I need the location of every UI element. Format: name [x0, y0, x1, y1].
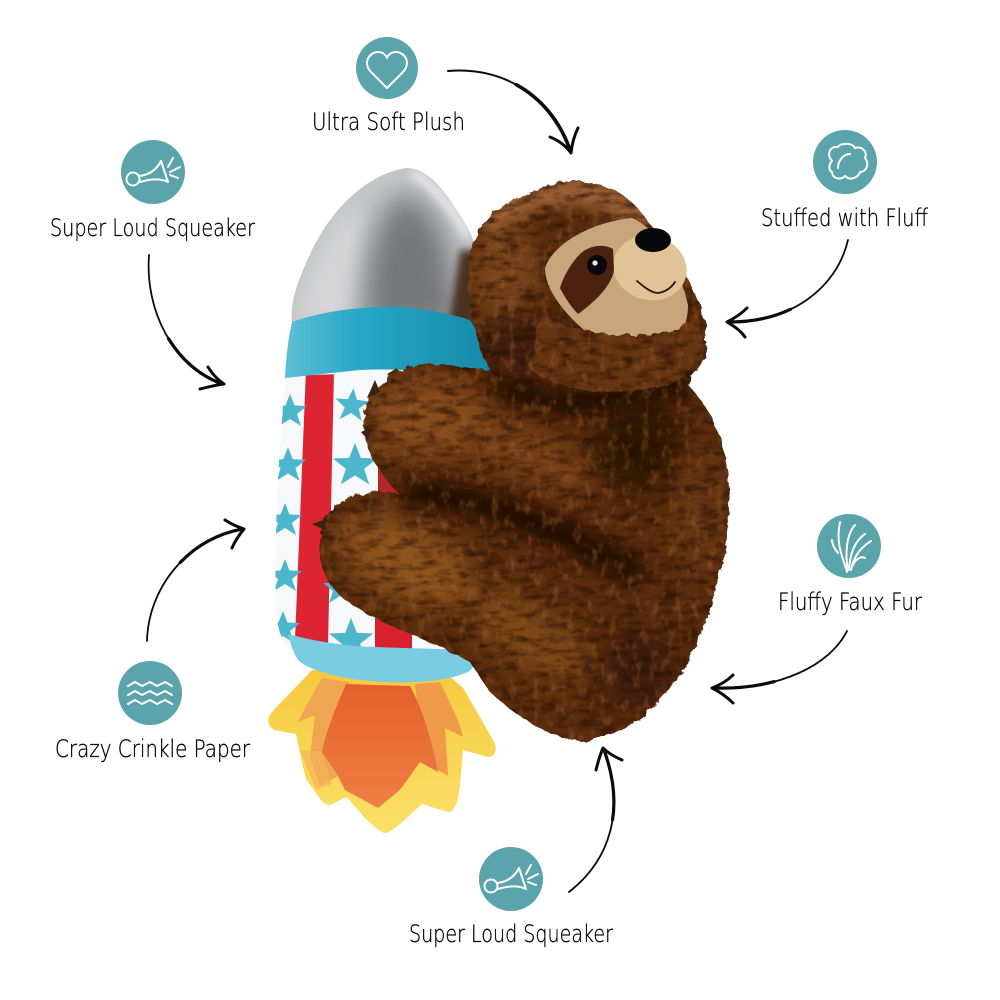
plush toy: sloth hugging rocket: [266, 160, 740, 833]
arrow: super loud squeaker bottom: [569, 748, 622, 892]
arrow: fluffy faux fur: [712, 631, 847, 703]
icon: waves: [118, 661, 182, 725]
rocket flame: [268, 670, 496, 833]
eye: [587, 255, 607, 275]
icon: horn: [479, 847, 543, 911]
arrow: ultra soft plush: [448, 70, 578, 153]
label: Crazy Crinkle Paper: [55, 735, 250, 763]
sloth claws: [312, 380, 380, 530]
icon: fur strands: [817, 514, 881, 578]
shadow between arms: [405, 495, 640, 575]
icon: heart: [356, 37, 418, 99]
lower body shadow: [600, 630, 680, 710]
feature: crazy crinkle paper: [55, 661, 250, 763]
upper arm light: [365, 380, 495, 456]
mouth: [637, 281, 675, 293]
arrow: stuffed with fluff: [727, 240, 848, 337]
eye patch: [560, 246, 614, 314]
label: Super Loud Squeaker: [409, 920, 613, 948]
head fur shading: [475, 220, 535, 330]
sloth body: [300, 170, 740, 750]
sloth face: [545, 218, 694, 345]
icon: cotton fluff: [813, 130, 877, 194]
icon: horn: [121, 140, 185, 204]
label: Fluffy Faux Fur: [778, 588, 922, 616]
feature: super loud squeaker left: [50, 140, 255, 242]
feature: super loud squeaker bottom: [409, 847, 613, 948]
rocket nose cone: [292, 168, 476, 330]
arrow: super loud squeaker left: [149, 255, 224, 389]
neck shadow: [490, 385, 690, 402]
rocket upper band: [285, 307, 495, 378]
chest shadow: [595, 400, 685, 490]
label: Super Loud Squeaker: [50, 214, 255, 242]
label: Stuffed with Fluff: [761, 204, 928, 232]
lower arm light: [325, 503, 482, 622]
feature: ultra soft plush: [312, 37, 465, 136]
sloth chin fur: [530, 315, 704, 393]
arrow: crazy crinkle paper: [147, 520, 244, 641]
red stripes: [295, 370, 334, 645]
nose: [635, 228, 671, 252]
feature: fluffy faux fur: [778, 514, 922, 616]
rocket lower band: [288, 634, 474, 682]
stars: [276, 388, 374, 646]
label: Ultra Soft Plush: [312, 108, 465, 136]
feature: stuffed with fluff: [761, 130, 928, 232]
torso right: [678, 440, 722, 580]
rocket body panel: [276, 374, 412, 648]
muzzle: [606, 228, 694, 308]
